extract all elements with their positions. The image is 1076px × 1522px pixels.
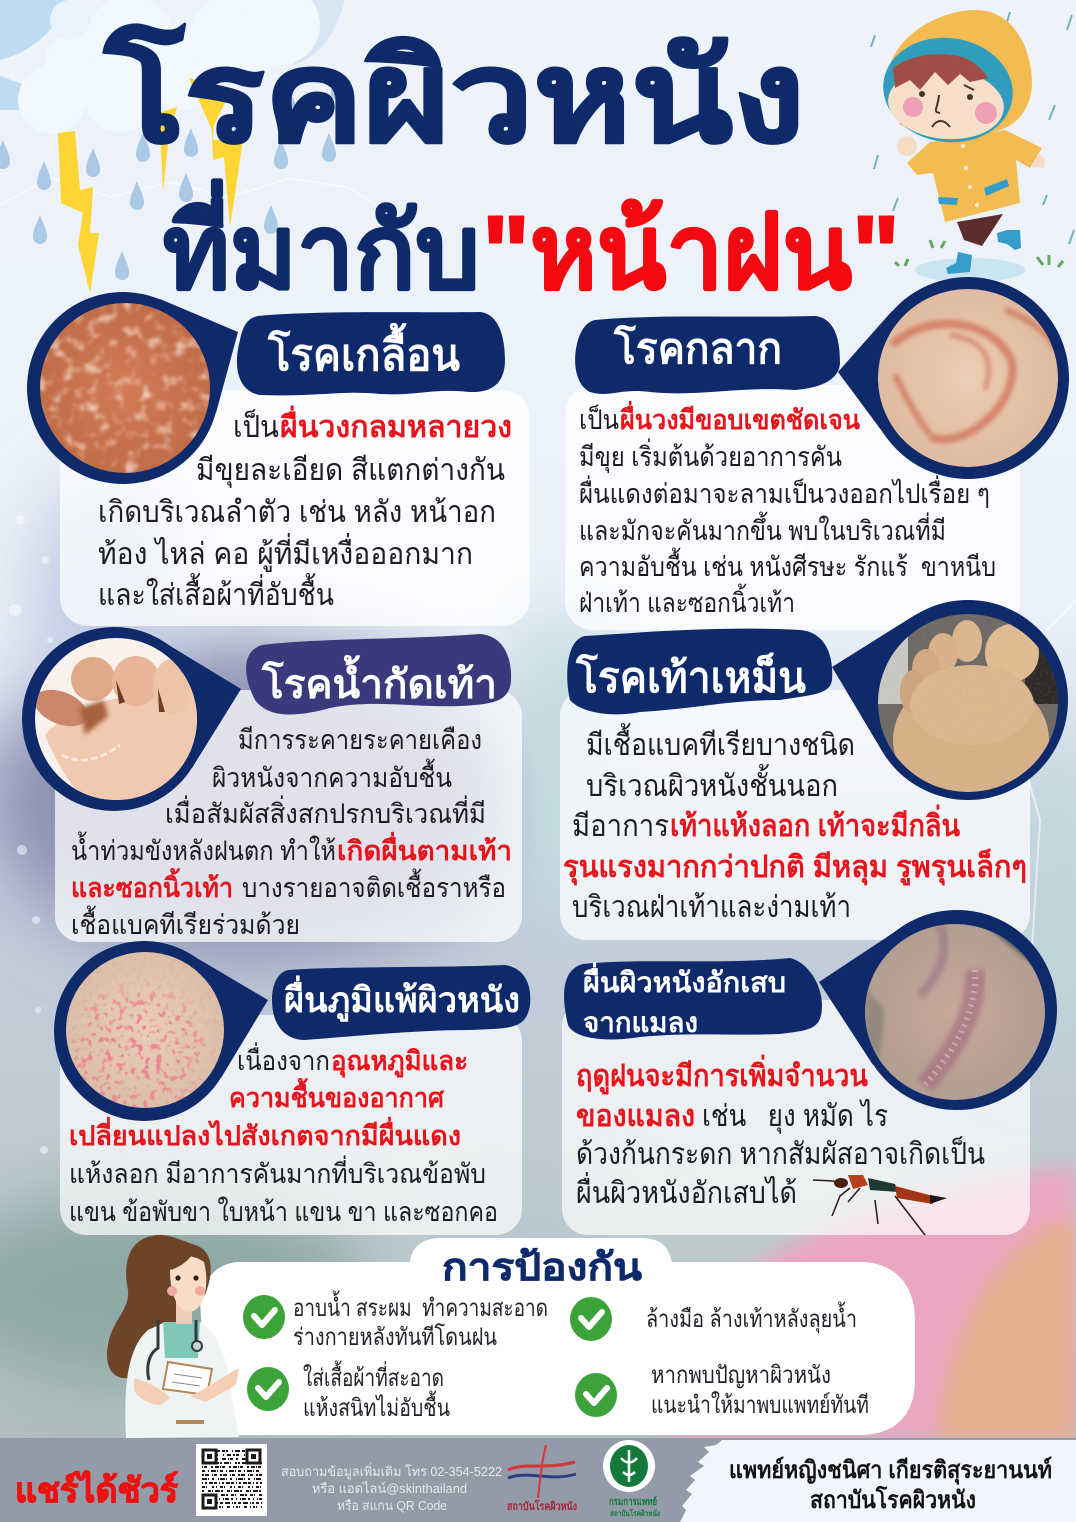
cloud with lightning and rain — [0, 0, 345, 293]
tip: see doctor — [651, 1362, 869, 1419]
heading pill — [237, 312, 505, 395]
heading pill — [575, 316, 840, 394]
title line 1: โรคผิวหนัง — [103, 23, 805, 168]
icon: green check — [247, 1367, 289, 1411]
body text: ผื่นวงมีขอบเขตชัดเจน — [620, 400, 860, 435]
body text — [576, 1054, 985, 1210]
body text: เนื่องจาก — [237, 1042, 330, 1076]
icon: green check — [570, 1297, 612, 1341]
author area: สถาบันโรคผิวหนัง — [810, 1485, 976, 1514]
body text: เชื้อแบคทีเรียร่วมด้วย — [71, 905, 300, 940]
skin photo lens — [838, 277, 1069, 479]
illustration: doctor — [107, 1235, 239, 1438]
body text — [563, 723, 1027, 924]
body text: มีขุย เริ่มต้นด้วยอาการคัน — [579, 438, 842, 474]
body text: แห้งลอก มีอาการคันมากที่บริเวณข้อพับ — [69, 1155, 486, 1189]
tip: bathe — [293, 1290, 548, 1351]
logo: department of medical services: สถาบันโรคผิวหนัง — [610, 1508, 660, 1518]
text background — [562, 1000, 1030, 1235]
body text — [69, 1042, 498, 1227]
tip: bathe: ร่างกายหลังทันทีโดนฝน — [293, 1323, 497, 1351]
panel: ผื่นภูมิแพ้ผิวหนัง — [54, 941, 530, 1235]
body text: ฤดูฝนจะมีการเพิ่มจำนวน — [576, 1054, 868, 1095]
heading pill — [564, 958, 822, 1039]
body text: ความอับชื้น เช่น หนังศีรษะ รักแร้ ขาหนีบ — [579, 547, 996, 582]
body text: เกิดบริเวณลำตัว เช่น หลัง หน้าอก — [98, 496, 496, 529]
heading pill: โรคเท้าเหม็น — [575, 652, 806, 701]
skin photo lens — [819, 910, 1057, 1110]
tip: clean clothes: ใส่เสื้อผ้าที่สะอาด — [303, 1360, 444, 1392]
heading pill: ผื่นผิวหนังอักเสบ — [583, 962, 786, 998]
logo: department of medical services: กรมการแพทย์ — [609, 1496, 657, 1508]
title line 2 navy: ที่มากับ — [163, 179, 480, 311]
body text: และใส่เสื้อผ้าที่อับชื้น — [98, 573, 334, 612]
text background — [565, 385, 1020, 630]
body text — [71, 725, 512, 940]
body text: เช่น ยุง หมัด ไร — [702, 1098, 888, 1135]
body text: ของแมลง — [576, 1100, 695, 1133]
body text: ผื่นผิวหนังอักเสบได้ — [576, 1172, 797, 1210]
panel: โรคเกลื้อน — [27, 292, 530, 626]
panel: โรคน้ำกัดเท้า — [22, 627, 522, 942]
panel: prevention — [200, 1238, 915, 1435]
body text: ท้อง ไหล่ คอ ผู้ที่มีเหงื่อออกมาก — [98, 533, 473, 572]
skin photo lens — [54, 941, 268, 1121]
body text: เปลี่ยนแปลงไปสังเกตจากมีผื่นแดง — [69, 1116, 461, 1151]
tip: clean clothes: แห้งสนิทไม่อับชื้น — [303, 1390, 450, 1422]
illustration: child in yellow raincoat — [871, 10, 1074, 282]
body text: บริเวณผิวหนังชั้นนอก — [586, 764, 838, 803]
body text: ผิวหนังจากความอับชื้น — [212, 758, 452, 793]
body text: ผื่นวงกลมหลายวง — [280, 405, 512, 444]
body text: อุณหภูมิและ — [331, 1046, 468, 1078]
author area — [680, 1440, 1076, 1522]
text background — [560, 690, 1030, 940]
title line 2 red: "หน้าฝน" — [482, 195, 900, 311]
heading pill: โรคเกลื้อน — [267, 322, 460, 380]
tip: wash hands: ล้างมือ ล้างเท้าหลังลุยน้ำ — [646, 1301, 857, 1334]
heading pill: ผื่นภูมิแพ้ผิวหนัง — [284, 975, 520, 1022]
body text: เกิดผื่นตามเท้า — [337, 831, 512, 866]
body text: เป็น — [579, 402, 619, 435]
tip: see doctor: หากพบปัญหาผิวหนัง — [651, 1362, 831, 1389]
contact text — [281, 1463, 502, 1513]
body text: มีอาการ — [572, 810, 669, 843]
contact text: หรือ แอดไลน์@skinthailand — [312, 1481, 467, 1496]
body text: แขน ข้อพับขา ใบหน้า แขน ขา และซอกคอ — [69, 1196, 498, 1227]
text background — [55, 690, 522, 942]
body text: มีขุยละเอียด สีแตกต่างกัน — [196, 454, 505, 489]
icon: green check — [243, 1295, 285, 1339]
body text — [98, 405, 512, 612]
footer — [0, 1438, 1076, 1522]
body text: มีการระคายระคายเคือง — [238, 725, 482, 755]
prevention heading: การป้องกัน — [442, 1247, 642, 1289]
body text: รุนแรงมากกว่าปกติ มีหลุม รูพรุนเล็กๆ — [563, 848, 1027, 886]
contact text: สอบถามข้อมูลเพิ่มเติม โทร 02-354-5222 — [281, 1463, 502, 1480]
icon: green check — [575, 1373, 617, 1417]
heading pill — [272, 965, 530, 1040]
body text: เท้าแห้งลอก เท้าจะมีกลิ่น — [670, 804, 960, 843]
share slogan: แชร์ได้ชัวร์ — [15, 1470, 179, 1510]
skin photo lens — [832, 600, 1068, 806]
heading pill: โรคน้ำกัดเท้า — [261, 655, 497, 707]
body text: บริเวณฝ่าเท้าและง่ามเท้า — [572, 891, 851, 924]
contact text: หรือ สแกน QR Code — [337, 1498, 447, 1513]
panel: ผื่นผิวหนังอักเสบจากแมลง — [562, 910, 1057, 1235]
body text: ฝ่าเท้า และซอกนิ้วเท้า — [579, 583, 795, 618]
body text: น้ำท่วมขังหลังฝนตก ทำให้ — [71, 831, 336, 866]
skin photo lens — [27, 292, 238, 484]
panel: โรคเท้าเหม็น — [560, 600, 1068, 940]
heading pill — [246, 634, 511, 715]
text background — [60, 1015, 522, 1235]
tip: see doctor: แนะนำให้มาพบแพทย์ทันที — [651, 1391, 869, 1419]
icon: rove beetle — [813, 1175, 947, 1235]
logo: department of medical services — [603, 1440, 660, 1518]
body text: มีเชื้อแบคทีเรียบางชนิด — [586, 723, 855, 762]
body text: เป็น — [233, 408, 279, 444]
body text: และซอกนิ้วเท้า — [71, 867, 233, 903]
body text: บางรายอาจติดเชื้อราหรือ — [242, 868, 506, 903]
skin photo lens — [22, 627, 241, 811]
panel: โรคกลาก — [565, 277, 1069, 630]
logo: institute of dermatology: สถาบันโรคผิวหนัง — [507, 1499, 577, 1513]
QR code — [196, 1444, 267, 1516]
body text: เมื่อสัมผัสสิ่งสกปรกบริเวณที่มี — [165, 795, 486, 829]
body text: ด้วงก้นกระดก หากสัมผัสอาจเกิดเป็น — [576, 1135, 985, 1171]
body text — [579, 400, 996, 618]
body text: ความชื้นของอากาศ — [229, 1077, 445, 1113]
white card — [200, 1238, 915, 1435]
body text: ผื่นแดงต่อมาจะลามเป็นวงออกไปเรื่อย ๆ — [579, 475, 990, 509]
heading pill: โรคกลาก — [613, 324, 782, 372]
tip: bathe: อาบน้ำ สระผม ทำความสะอาด — [293, 1290, 548, 1322]
logo: institute of dermatology — [507, 1445, 577, 1513]
heading pill: จากแมลง — [583, 1007, 698, 1038]
body text: และมักจะคันมากขึ้น พบในบริเวณที่มี — [579, 511, 946, 546]
tip: clean clothes — [303, 1360, 450, 1422]
heading pill — [567, 629, 832, 714]
text background — [60, 390, 530, 626]
